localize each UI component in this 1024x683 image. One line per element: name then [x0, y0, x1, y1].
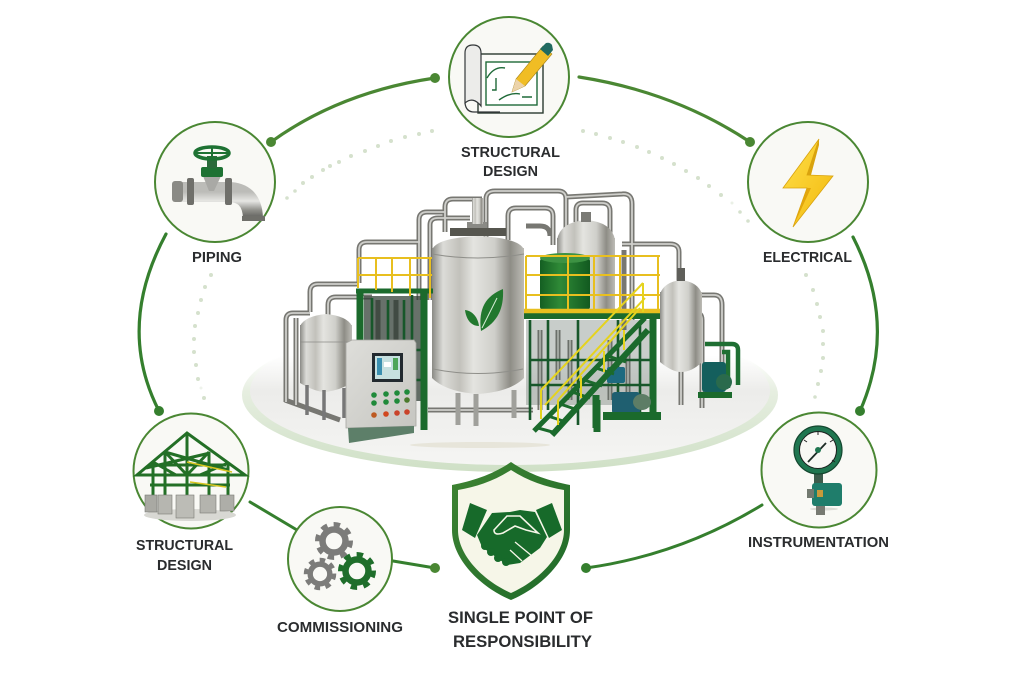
platform disc [242, 317, 778, 472]
node: structural design (top) [449, 17, 569, 180]
back steel tank [557, 212, 615, 318]
node: piping [155, 122, 275, 266]
staircase [534, 283, 648, 435]
icon: valve [172, 147, 265, 221]
node: structural design (left) [134, 414, 248, 574]
main steel tank [432, 198, 524, 426]
left platform and railing [356, 258, 433, 430]
label: STRUCTURAL [136, 537, 233, 554]
arc: piping to structural frame [139, 234, 166, 416]
left steel tank [300, 314, 352, 420]
leaf logo [465, 289, 503, 331]
label [136, 537, 233, 574]
arc: commissioning to shield [393, 561, 440, 573]
icon: steel frame [137, 433, 245, 521]
icon: lightning bolt [783, 139, 833, 227]
label [448, 608, 593, 651]
label: COMMISSIONING [277, 619, 403, 636]
processing plant [285, 191, 738, 443]
icon: blueprint and pencil [465, 43, 553, 113]
pipework [285, 191, 738, 420]
label: INSTRUMENTATION [748, 534, 889, 551]
label: STRUCTURAL [461, 144, 560, 161]
pumps [603, 362, 732, 420]
right platform and railing [524, 256, 660, 428]
node: commissioning [277, 507, 403, 636]
right steel tank [660, 268, 702, 372]
arc: structural design to electrical [579, 77, 755, 147]
green vessel [540, 253, 590, 310]
icon: gears [306, 524, 374, 588]
buttons [371, 389, 410, 418]
arc: structural design to piping [266, 73, 440, 147]
label: ELECTRICAL [763, 249, 852, 266]
arc: instrumentation to shield [581, 505, 762, 573]
label: SINGLE POINT OF [448, 608, 593, 627]
node: instrumentation [748, 412, 889, 551]
dark support tangle [364, 295, 654, 425]
touchscreen [372, 353, 403, 382]
node: electrical [748, 122, 868, 266]
icon: handshake [462, 503, 562, 566]
shield: single point of responsibility [448, 462, 593, 651]
label: PIPING [192, 249, 242, 266]
label [461, 144, 560, 180]
control panel [346, 340, 416, 443]
arc: electrical to instrumentation [853, 237, 877, 416]
label: DESIGN [157, 557, 212, 574]
dotted inner ring [192, 129, 825, 400]
icon: pressure gauge [794, 426, 842, 515]
label: RESPONSIBILITY [453, 632, 593, 651]
label: DESIGN [483, 163, 538, 180]
arc: structural frame to commissioning [250, 502, 297, 530]
